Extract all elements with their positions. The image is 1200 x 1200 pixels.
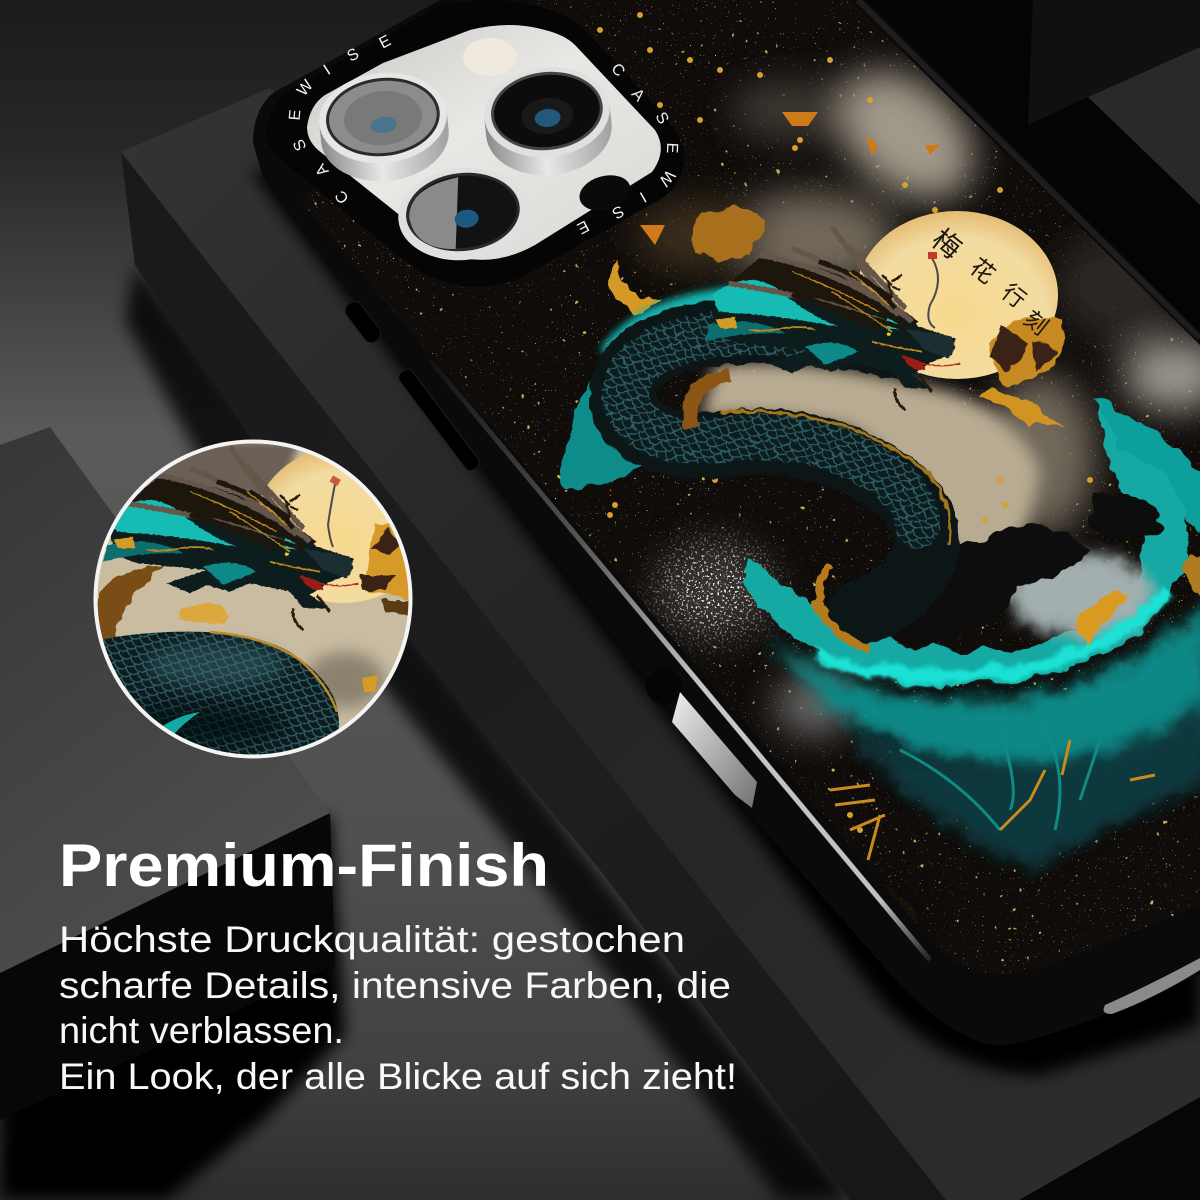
inset moon: [255, 447, 431, 603]
CASEWISE ring lettering: I: [321, 62, 334, 79]
island ring: [266, 1, 684, 287]
inset border: [96, 442, 410, 756]
moon calligraphy: 行: [997, 278, 1031, 313]
CASEWISE ring lettering: W: [294, 76, 317, 100]
inset cord: [328, 484, 335, 547]
gold veins lower art: [830, 740, 1155, 860]
CASEWISE ring lettering: E: [287, 109, 304, 121]
charging port: [1104, 958, 1200, 1014]
dragon body: [622, 330, 950, 650]
inset teal streak: [150, 712, 200, 745]
gold speckle: [280, 0, 1200, 990]
dark rock: [898, 523, 1090, 644]
small button: [342, 298, 384, 346]
inset gold flake: [362, 675, 378, 692]
burnt gold on moon: [980, 318, 1060, 425]
artwork back: [280, 0, 1200, 990]
gold rock right edge: [1181, 554, 1200, 596]
moon calligraphy: [932, 227, 1050, 336]
CASEWISE ring lettering: S: [290, 136, 310, 153]
moon seal: [928, 252, 937, 259]
CASEWISE ring lettering: A: [312, 160, 332, 179]
inset gold patch: [180, 604, 230, 625]
pedestal dark base corner: [946, 950, 1200, 1200]
orange flakes upper art: [640, 112, 940, 245]
inset body highlight: [145, 643, 285, 687]
inset gold body line: [210, 632, 337, 712]
inset grey sky: [95, 441, 300, 560]
inset grey smudge: [305, 652, 385, 708]
base paint: [280, 0, 1200, 990]
silver side button: [672, 692, 757, 808]
moon calligraphy: 刻: [1019, 305, 1053, 340]
inset tan base: [95, 441, 411, 757]
left stepped block: [0, 427, 345, 1200]
CASEWISE ring lettering: S: [652, 109, 672, 127]
CASEWISE ring lettering: E: [377, 32, 394, 52]
case body: [253, 0, 1200, 1045]
CASEWISE ring lettering: S: [609, 202, 627, 222]
moon calligraphy: 梅: [926, 223, 967, 265]
CASEWISE ring lettering: S: [344, 45, 362, 65]
dark wall behind phone: [860, 0, 1200, 1000]
flash: [463, 38, 517, 76]
step front shadow: [0, 813, 345, 1200]
phone with case: [250, 0, 1200, 1075]
description text: [59, 919, 737, 1097]
pedestal side face: [121, 152, 946, 1200]
microphone hole: [575, 170, 635, 216]
inset dark lower mist: [100, 680, 240, 740]
waves: [563, 210, 1200, 870]
inset head and mane: [103, 447, 358, 630]
CASEWISE ring lettering: C: [607, 60, 628, 80]
lens bottom: [394, 161, 533, 267]
teal back spray: [596, 282, 729, 356]
CASEWISE ring lettering: [287, 32, 680, 237]
upper right block top: [1088, 47, 1200, 205]
button recess: [646, 668, 682, 704]
volume button: [396, 366, 482, 474]
CASEWISE ring lettering: A: [628, 86, 648, 105]
step front face: [0, 813, 335, 1120]
CASEWISE ring lettering: I: [637, 188, 649, 205]
foam: [1008, 553, 1152, 637]
inset body shading: [95, 705, 285, 745]
wave bright crest: [815, 590, 1170, 676]
gold on foam: [1075, 594, 1130, 645]
moon calligraphy: 花: [964, 253, 1000, 290]
tan sky behind dragon: [700, 362, 1040, 565]
inset seal: [330, 475, 341, 486]
gold flecks scattered: [597, 12, 1093, 833]
foam speckle left: [630, 516, 800, 664]
inset lower body: [98, 632, 339, 762]
description text: scharfe Details, intensive Farben, die: [59, 965, 731, 1006]
description text: Höchste Druckqualität: gestochen: [59, 919, 685, 960]
case shadow: [250, 170, 1200, 1075]
cast shadow of pedestal: [125, 265, 850, 1200]
camera island: [266, 1, 684, 287]
silver edge highlight: [430, 360, 930, 960]
magnified detail inset: [95, 441, 431, 762]
inset artwork: [95, 441, 431, 762]
inset neck: [95, 565, 165, 640]
description text: Ein Look, der alle Blicke auf sich zieht!: [59, 1056, 737, 1097]
CASEWISE ring lettering: C: [332, 187, 353, 206]
moon cord: [928, 258, 938, 328]
CASEWISE ring lettering: E: [574, 217, 591, 237]
dragon head and mane: [705, 227, 960, 410]
glass window: [307, 25, 661, 260]
lens top right: [480, 61, 616, 181]
title: Premium-Finish: [59, 832, 549, 899]
step top surface: [0, 427, 330, 973]
moon: [856, 211, 1058, 379]
clouds and mist: [635, 45, 1200, 950]
upper right wall panel: [1028, 0, 1200, 125]
CASEWISE ring lettering: E: [663, 142, 680, 154]
lens top left: [315, 67, 453, 187]
paint speckle: [280, 0, 1200, 990]
description text: nicht verblassen.: [59, 1010, 344, 1051]
teal strands lower art: [899, 740, 1100, 831]
right edge highlight: [858, 0, 1200, 338]
CASEWISE ring lettering: W: [655, 166, 678, 190]
inset burnt gold: [360, 520, 411, 615]
gold near neck: [690, 210, 765, 258]
